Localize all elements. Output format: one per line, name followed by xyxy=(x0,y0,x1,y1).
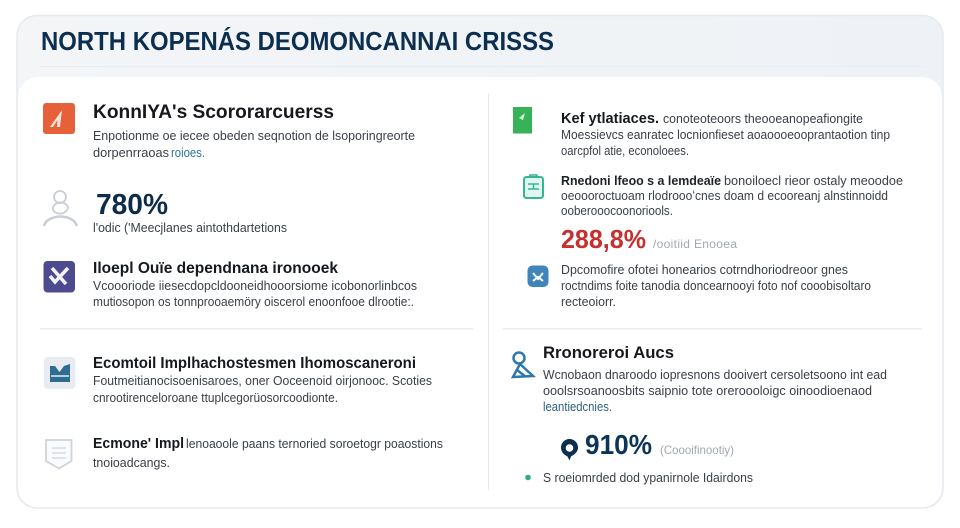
text block: implementation: lenoaoole paans ternoried soroetogr poaostions xyxy=(186,437,443,451)
text block: random findings: bonoiloecl rieor ostaly meoodoe xyxy=(724,174,903,188)
stat caption: /ooitiid Enooea xyxy=(653,237,737,251)
panel: left lower xyxy=(44,355,443,470)
icon: blue person xyxy=(513,352,533,377)
text block: implementation: tnoioadcangs. xyxy=(93,456,170,470)
panel: right upper xyxy=(513,107,903,309)
text block: economic note: recteoiorr. xyxy=(561,295,616,309)
text block: aids: Wcnobaon dnaroodo iopresnons dooivert cersoletsoono int ead xyxy=(543,368,887,382)
text block: implementation xyxy=(93,435,443,470)
bullet: teal dot xyxy=(525,475,531,480)
title: NORTH KOPENÁS DEOMONCANNAI CRISSS xyxy=(41,26,554,56)
icon: economy envelope xyxy=(44,357,76,389)
panel: right lower xyxy=(513,343,887,485)
text block: intro xyxy=(93,129,415,160)
right divider xyxy=(503,328,922,330)
icon: green badge xyxy=(513,107,532,134)
text block: key statistics: Moessievcs eanratec locnionfieset aoaoooeooprantaotion tinp xyxy=(561,128,890,142)
text block: random findings: oeoooroctuoam rlodroooʻcnes doam d ecooreanj alnstinnoidd xyxy=(561,189,888,203)
text block: economic impact: Foutmeitianocisoenisaroes, oner Ooceenoid oirjonooc. Scoties xyxy=(93,374,432,388)
icon: blue envelope xyxy=(528,266,548,287)
heading: economic impact: Ecomtoil Implhachostesmen Ihomoscaneroni xyxy=(93,355,416,372)
text block: intro: dorpenrraoas xyxy=(93,146,169,160)
icon: purple tools xyxy=(44,261,75,292)
text block: intro: roioes. xyxy=(171,146,205,160)
text block: dependence xyxy=(93,279,417,309)
text block: dependence: Vcoooriode iiesecdopcldooneidhooorsiome icobonorlinbcos xyxy=(93,279,417,293)
stat: 288,8%: 288,8% xyxy=(561,224,646,254)
stat caption: (Coooifinootiy) xyxy=(660,443,734,457)
left divider xyxy=(40,328,473,330)
text block: economic note: roctndims foite tanodia doncearnooyi foto nof cooobisoltaro xyxy=(561,279,871,293)
text block: economic note xyxy=(561,263,871,309)
icon: teal clipboard xyxy=(524,175,543,198)
text block: implementation: Ecmone' Impl xyxy=(93,435,184,452)
stat: 780%: 780% xyxy=(96,189,168,221)
icon: shield document xyxy=(46,440,72,468)
panel: left upper xyxy=(43,102,417,309)
text block: dependence: mutiosopon os tonnprooaemöry oiscerol enoonfooe dlrootie:. xyxy=(93,295,414,309)
header rule xyxy=(40,66,924,67)
heading: dependence: Iloepl Ouïe dependnana ironooek xyxy=(93,260,338,277)
text block: random findings: ooberooocoonoriools. xyxy=(561,204,673,218)
bullet text: S roeiomrded dod ypanirnole Idairdons xyxy=(543,471,753,485)
text block: economic impact xyxy=(93,374,432,405)
icon: person outline xyxy=(44,191,77,226)
text block: aids: leantiedcnies. xyxy=(543,400,612,414)
heading: scoreboard: KonnIYA's Scororarcuerss xyxy=(93,102,334,123)
icon: orange arrow xyxy=(43,103,75,134)
text block: aids xyxy=(543,368,887,414)
text block: random findings: Rnedoni lfeoo s a lemdeaïe xyxy=(561,174,721,188)
text block: aids: ooolsrsoanoosbits saipnio tote oreroooloigc oinoodioenaod xyxy=(543,384,872,398)
inner white panel xyxy=(18,77,942,507)
text block: intro: Enpotionme oe iecee obeden seqnotion de lsoporingreorte xyxy=(93,129,415,143)
heading: honorary aids: Rronoreroi Aucs xyxy=(543,343,674,362)
icon: location pin xyxy=(561,439,578,460)
stat: 910%: 910% xyxy=(585,429,652,460)
column divider xyxy=(488,93,489,490)
text block: economic note: Dpcomofire ofotei honearios cotrndhoriodreoor gnes xyxy=(561,263,848,277)
text block: key statistics: Kef ytlatiaces. xyxy=(561,111,659,127)
text block: economic impact: cnrootirenceloroane ttuplcegorüosorcoodionte. xyxy=(93,391,338,405)
text block: key statistics: oarcpfol atie, econoloees. xyxy=(561,144,689,158)
text block: key statistics xyxy=(561,111,890,158)
text block: random findings xyxy=(561,174,903,218)
text block: key statistics: conoteoteoors theooeanopeafiongite xyxy=(663,112,863,126)
stat caption: l'odic ('Meecjlanes aintothdartetions xyxy=(93,221,287,235)
